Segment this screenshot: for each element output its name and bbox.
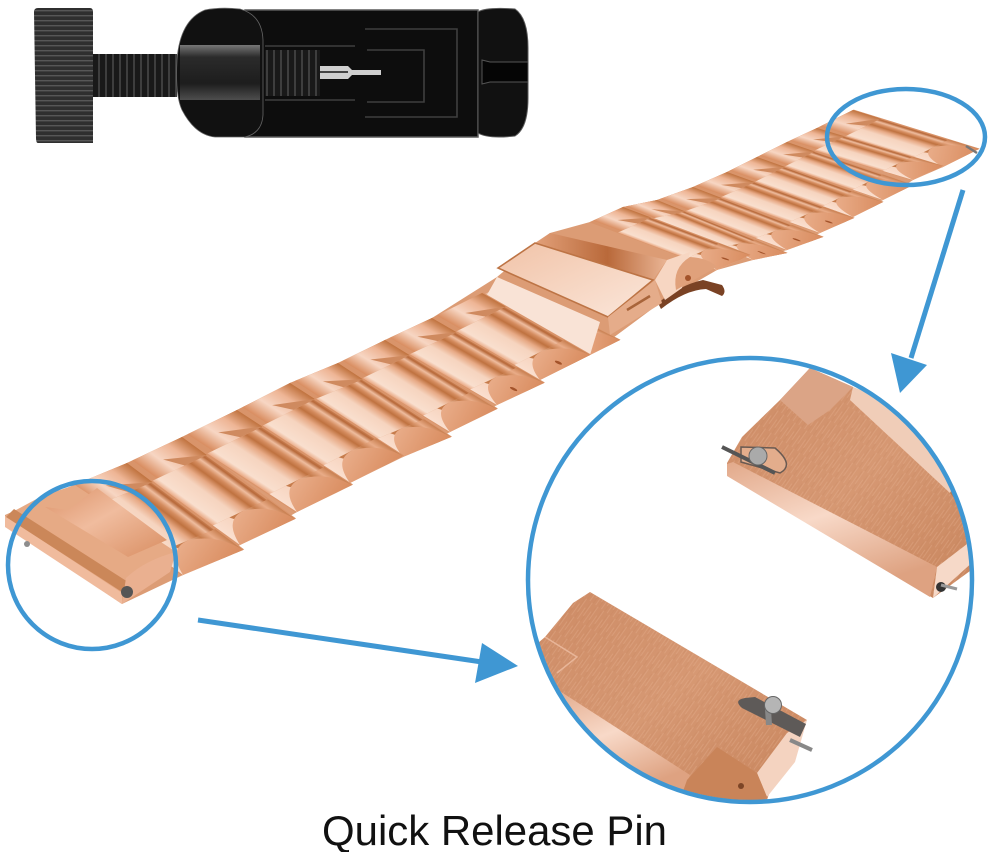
upper spring pin [722, 447, 775, 473]
watch band [5, 110, 980, 604]
zoom disc [530, 360, 970, 800]
clasp top plate [498, 243, 653, 317]
zoom detail circle [528, 358, 985, 805]
ellipse highlight top right [827, 89, 985, 185]
tool threaded screw [93, 54, 177, 97]
tool knurled knob [34, 8, 93, 143]
circle highlight left [8, 481, 176, 649]
clasp side [608, 280, 662, 335]
clasp rear section [535, 233, 667, 280]
lower hole [738, 783, 744, 789]
upper link end face [933, 544, 970, 598]
upper link far tab [850, 387, 951, 493]
upper link tab [780, 368, 853, 425]
lower link step mark [545, 637, 577, 673]
band end pin right [966, 146, 977, 153]
tool rail lines [265, 29, 457, 117]
tool right block notch [482, 60, 528, 84]
upper zoomed link [722, 368, 985, 598]
tool left block [177, 8, 263, 137]
tool shaft band [180, 45, 260, 100]
tool body [245, 10, 478, 137]
upper link rim [727, 462, 937, 597]
band end link left [5, 485, 176, 604]
lower link rim [561, 692, 690, 790]
clasp [473, 233, 717, 355]
lower spring pin [764, 696, 812, 750]
lower link tab [684, 747, 767, 800]
icon: spring bar tool [34, 8, 528, 143]
lower slot [738, 697, 806, 737]
pin left end [121, 586, 133, 598]
clasp far barrel [655, 252, 690, 300]
clasp lower plate [473, 277, 600, 355]
upper link notch [950, 491, 954, 497]
lower zoomed link [530, 592, 812, 805]
tool inner thread [265, 50, 320, 96]
clasp cap hole [685, 275, 691, 281]
tool right block [478, 8, 528, 137]
clasp hook [658, 280, 724, 309]
pin far end [24, 541, 30, 547]
zoom circle ring [528, 358, 972, 802]
lower link end face [757, 720, 807, 797]
upper end pin [936, 582, 957, 592]
arrow: top right to zoom circle [891, 190, 963, 393]
upper slot [741, 447, 786, 473]
band links far end [589, 110, 980, 270]
tool pin tip [320, 66, 381, 79]
band silhouette [5, 110, 967, 604]
arrow: left circle to zoom circle [198, 620, 518, 683]
band link under clasp [476, 283, 621, 355]
clasp side slot [627, 296, 650, 310]
band links near end [66, 292, 591, 576]
clasp far cap [675, 257, 717, 290]
